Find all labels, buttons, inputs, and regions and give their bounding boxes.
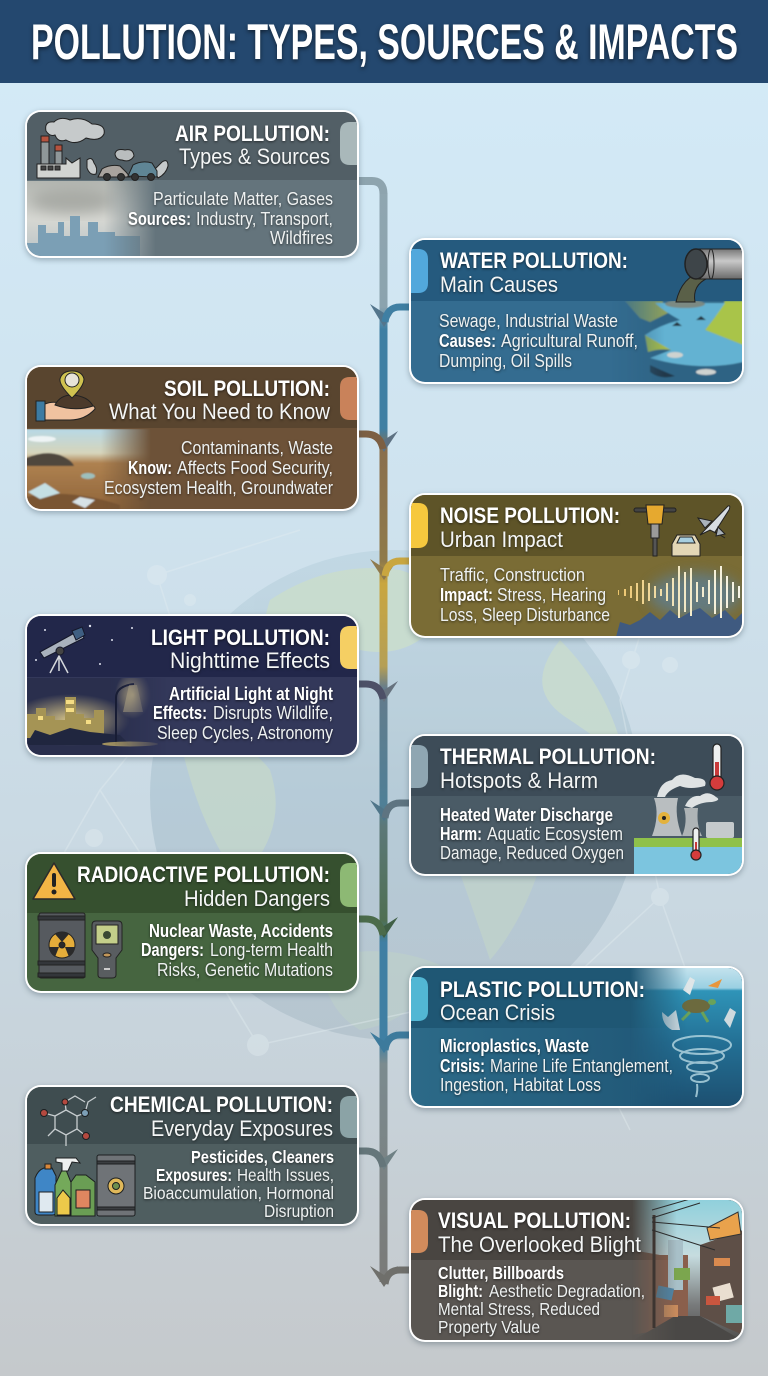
icon: factory and cars: [37, 118, 168, 180]
billboard and utility pole: [652, 1199, 741, 1328]
heading: What You Need to Know: [109, 399, 330, 424]
body text: [440, 804, 624, 863]
body text: Exposures:: [156, 1165, 232, 1185]
heading: NOISE POLLUTION:: [440, 503, 620, 528]
heading: Main Causes: [440, 272, 558, 297]
body text: Sewage, Industrial Waste: [439, 310, 618, 331]
arrow: plastic: [370, 1032, 409, 1053]
heading: [440, 503, 620, 552]
body text: [128, 188, 333, 248]
heading: Everyday Exposures: [151, 1116, 333, 1141]
heading: VISUAL POLLUTION:: [438, 1208, 631, 1233]
body text: [439, 310, 638, 371]
body text: Property Value: [438, 1317, 540, 1337]
heading: [109, 376, 330, 424]
icon: discharge pipe: [676, 249, 746, 302]
icon: geiger counter: [92, 921, 122, 978]
body text: Aquatic Ecosystem: [487, 823, 623, 844]
body text: Traffic, Construction: [440, 564, 585, 585]
heading: RADIOACTIVE POLLUTION:: [77, 862, 330, 887]
body text: Sleep Cycles, Astronomy: [157, 722, 334, 743]
heading: [440, 744, 656, 793]
image: sound wave and skyline: [616, 566, 743, 637]
heading: LIGHT POLLUTION:: [151, 625, 330, 650]
image: polluted river: [626, 301, 742, 382]
arrow: radioactive: [358, 917, 398, 938]
network lines and nodes: [60, 530, 700, 1130]
body text: Affects Food Security,: [177, 457, 333, 478]
body text: Nuclear Waste, Accidents: [149, 920, 333, 941]
body text: Industry, Transport,: [196, 208, 333, 229]
body text: Ingestion, Habitat Loss: [440, 1074, 601, 1095]
accent tab: [340, 377, 358, 420]
image: cluttered street: [632, 1199, 744, 1341]
body text: Stress, Hearing: [497, 584, 606, 605]
body text: Particulate Matter, Gases: [153, 188, 333, 209]
accent tab: [340, 626, 358, 669]
panel: thermal pollution: [409, 734, 744, 876]
faded globe: [150, 550, 640, 1040]
body text: Wildfires: [270, 227, 333, 248]
heading: [438, 1208, 641, 1257]
body text: Harm:: [440, 823, 482, 844]
body text: Aesthetic Degradation,: [489, 1281, 645, 1301]
accent tab: [410, 503, 428, 548]
accent tab: [340, 863, 358, 907]
arrow: light: [358, 681, 398, 702]
arrow: noise: [370, 559, 409, 580]
heading: [110, 1092, 333, 1141]
body text: Marine Life Entanglement,: [490, 1055, 673, 1076]
panel: soil pollution: [25, 365, 359, 511]
body text: Heated Water Discharge: [440, 804, 613, 825]
stars: [35, 625, 133, 665]
accent tab: [410, 745, 428, 788]
body text: [440, 1035, 673, 1095]
body text: Long-term Health: [210, 939, 333, 960]
body text: Pesticides, Cleaners: [191, 1147, 334, 1167]
body text: Impact:: [440, 584, 493, 605]
body text: Clutter, Billboards: [438, 1263, 564, 1283]
icon: chemical containers: [35, 1155, 135, 1216]
image: smoggy skyline: [26, 181, 156, 257]
heading: Hidden Dangers: [184, 886, 330, 911]
panel: noise pollution: [409, 493, 744, 638]
heading: The Overlooked Blight: [438, 1232, 641, 1257]
body text: Damage, Reduced Oxygen: [440, 842, 624, 863]
heading: [77, 862, 330, 911]
heading: [151, 625, 330, 673]
icon: radioactive barrel: [38, 913, 85, 978]
title banner: [0, 0, 768, 83]
body text: Health Issues,: [237, 1165, 334, 1185]
body text: Dangers:: [141, 939, 204, 960]
arrow: water: [370, 304, 409, 327]
heading: Hotspots & Harm: [440, 768, 598, 793]
panel: radioactive pollution: [25, 852, 359, 993]
body text: Sources:: [128, 208, 191, 229]
body text: [104, 437, 333, 498]
heading: PLASTIC POLLUTION:: [440, 977, 645, 1002]
heading: Nighttime Effects: [170, 648, 330, 673]
accent tab: [410, 249, 428, 293]
body text: Mental Stress, Reduced: [438, 1299, 600, 1319]
panel: water pollution: [409, 238, 746, 384]
icon: molecule: [40, 1096, 96, 1146]
heading: THERMAL POLLUTION:: [440, 744, 656, 769]
accent tab: [410, 977, 428, 1021]
icon: warning triangle: [33, 863, 75, 899]
icon: telescope: [40, 627, 85, 673]
icon: plastic vortex: [673, 1036, 731, 1097]
body text: Crisis:: [440, 1055, 485, 1076]
body text: Microplastics, Waste: [440, 1035, 589, 1056]
body text: Disruption: [264, 1201, 334, 1221]
heading: Types & Sources: [179, 144, 330, 169]
heading: SOIL POLLUTION:: [164, 376, 330, 401]
body text: [153, 683, 334, 743]
image: ocean with plastic: [630, 967, 744, 1107]
icon: jackhammer, car and plane: [634, 505, 730, 556]
body text: Know:: [128, 457, 172, 478]
body text: Bioaccumulation, Hormonal: [143, 1183, 334, 1203]
body text: Blight:: [438, 1281, 483, 1301]
heading: Ocean Crisis: [440, 1000, 555, 1025]
accent tab: [410, 1210, 428, 1253]
heading: CHEMICAL POLLUTION:: [110, 1092, 333, 1117]
body text: Agricultural Runoff,: [501, 330, 638, 351]
icon: power plant: [652, 774, 734, 838]
heading: [175, 121, 330, 169]
image: polluted land: [26, 429, 151, 510]
body text: Dumping, Oil Spills: [439, 350, 572, 371]
body text: Effects:: [153, 702, 207, 723]
panel: air pollution: [25, 110, 359, 258]
arrow: soil: [358, 431, 398, 452]
body text: Ecosystem Health, Groundwater: [104, 477, 333, 498]
arrow: chemical: [358, 1149, 398, 1170]
accent tab: [340, 122, 358, 165]
body text: Causes:: [439, 330, 496, 351]
body text: Disrupts Wildlife,: [213, 702, 333, 723]
arrows and connectors: [358, 181, 409, 1287]
image: water and bank: [634, 838, 744, 876]
panel: light pollution: [10, 614, 359, 757]
body text: [141, 920, 333, 980]
accent tab: [340, 1096, 358, 1138]
heading: AIR POLLUTION:: [175, 121, 330, 146]
body text: [440, 564, 610, 625]
body text: Artificial Light at Night: [169, 683, 333, 704]
heading: Urban Impact: [440, 527, 563, 552]
flow spine: [380, 193, 388, 1282]
arrow: visual: [370, 1266, 409, 1287]
body text: Loss, Sleep Disturbance: [440, 604, 610, 625]
panel: plastic pollution: [409, 966, 744, 1108]
connector: air: [358, 181, 384, 194]
heading: WATER POLLUTION:: [440, 248, 628, 273]
body text: Risks, Genetic Mutations: [157, 959, 333, 980]
arrow: thermal: [370, 800, 409, 821]
heading: [440, 248, 628, 297]
panel: visual pollution: [409, 1198, 744, 1342]
icon: thermometers: [691, 744, 724, 860]
body text: [438, 1263, 645, 1337]
body text: [143, 1147, 334, 1221]
image: night city: [27, 678, 158, 755]
body text: Contaminants, Waste: [181, 437, 333, 458]
panel: chemical pollution: [25, 1085, 359, 1226]
heading: [440, 977, 645, 1025]
icon: hand holding soil: [36, 371, 95, 421]
